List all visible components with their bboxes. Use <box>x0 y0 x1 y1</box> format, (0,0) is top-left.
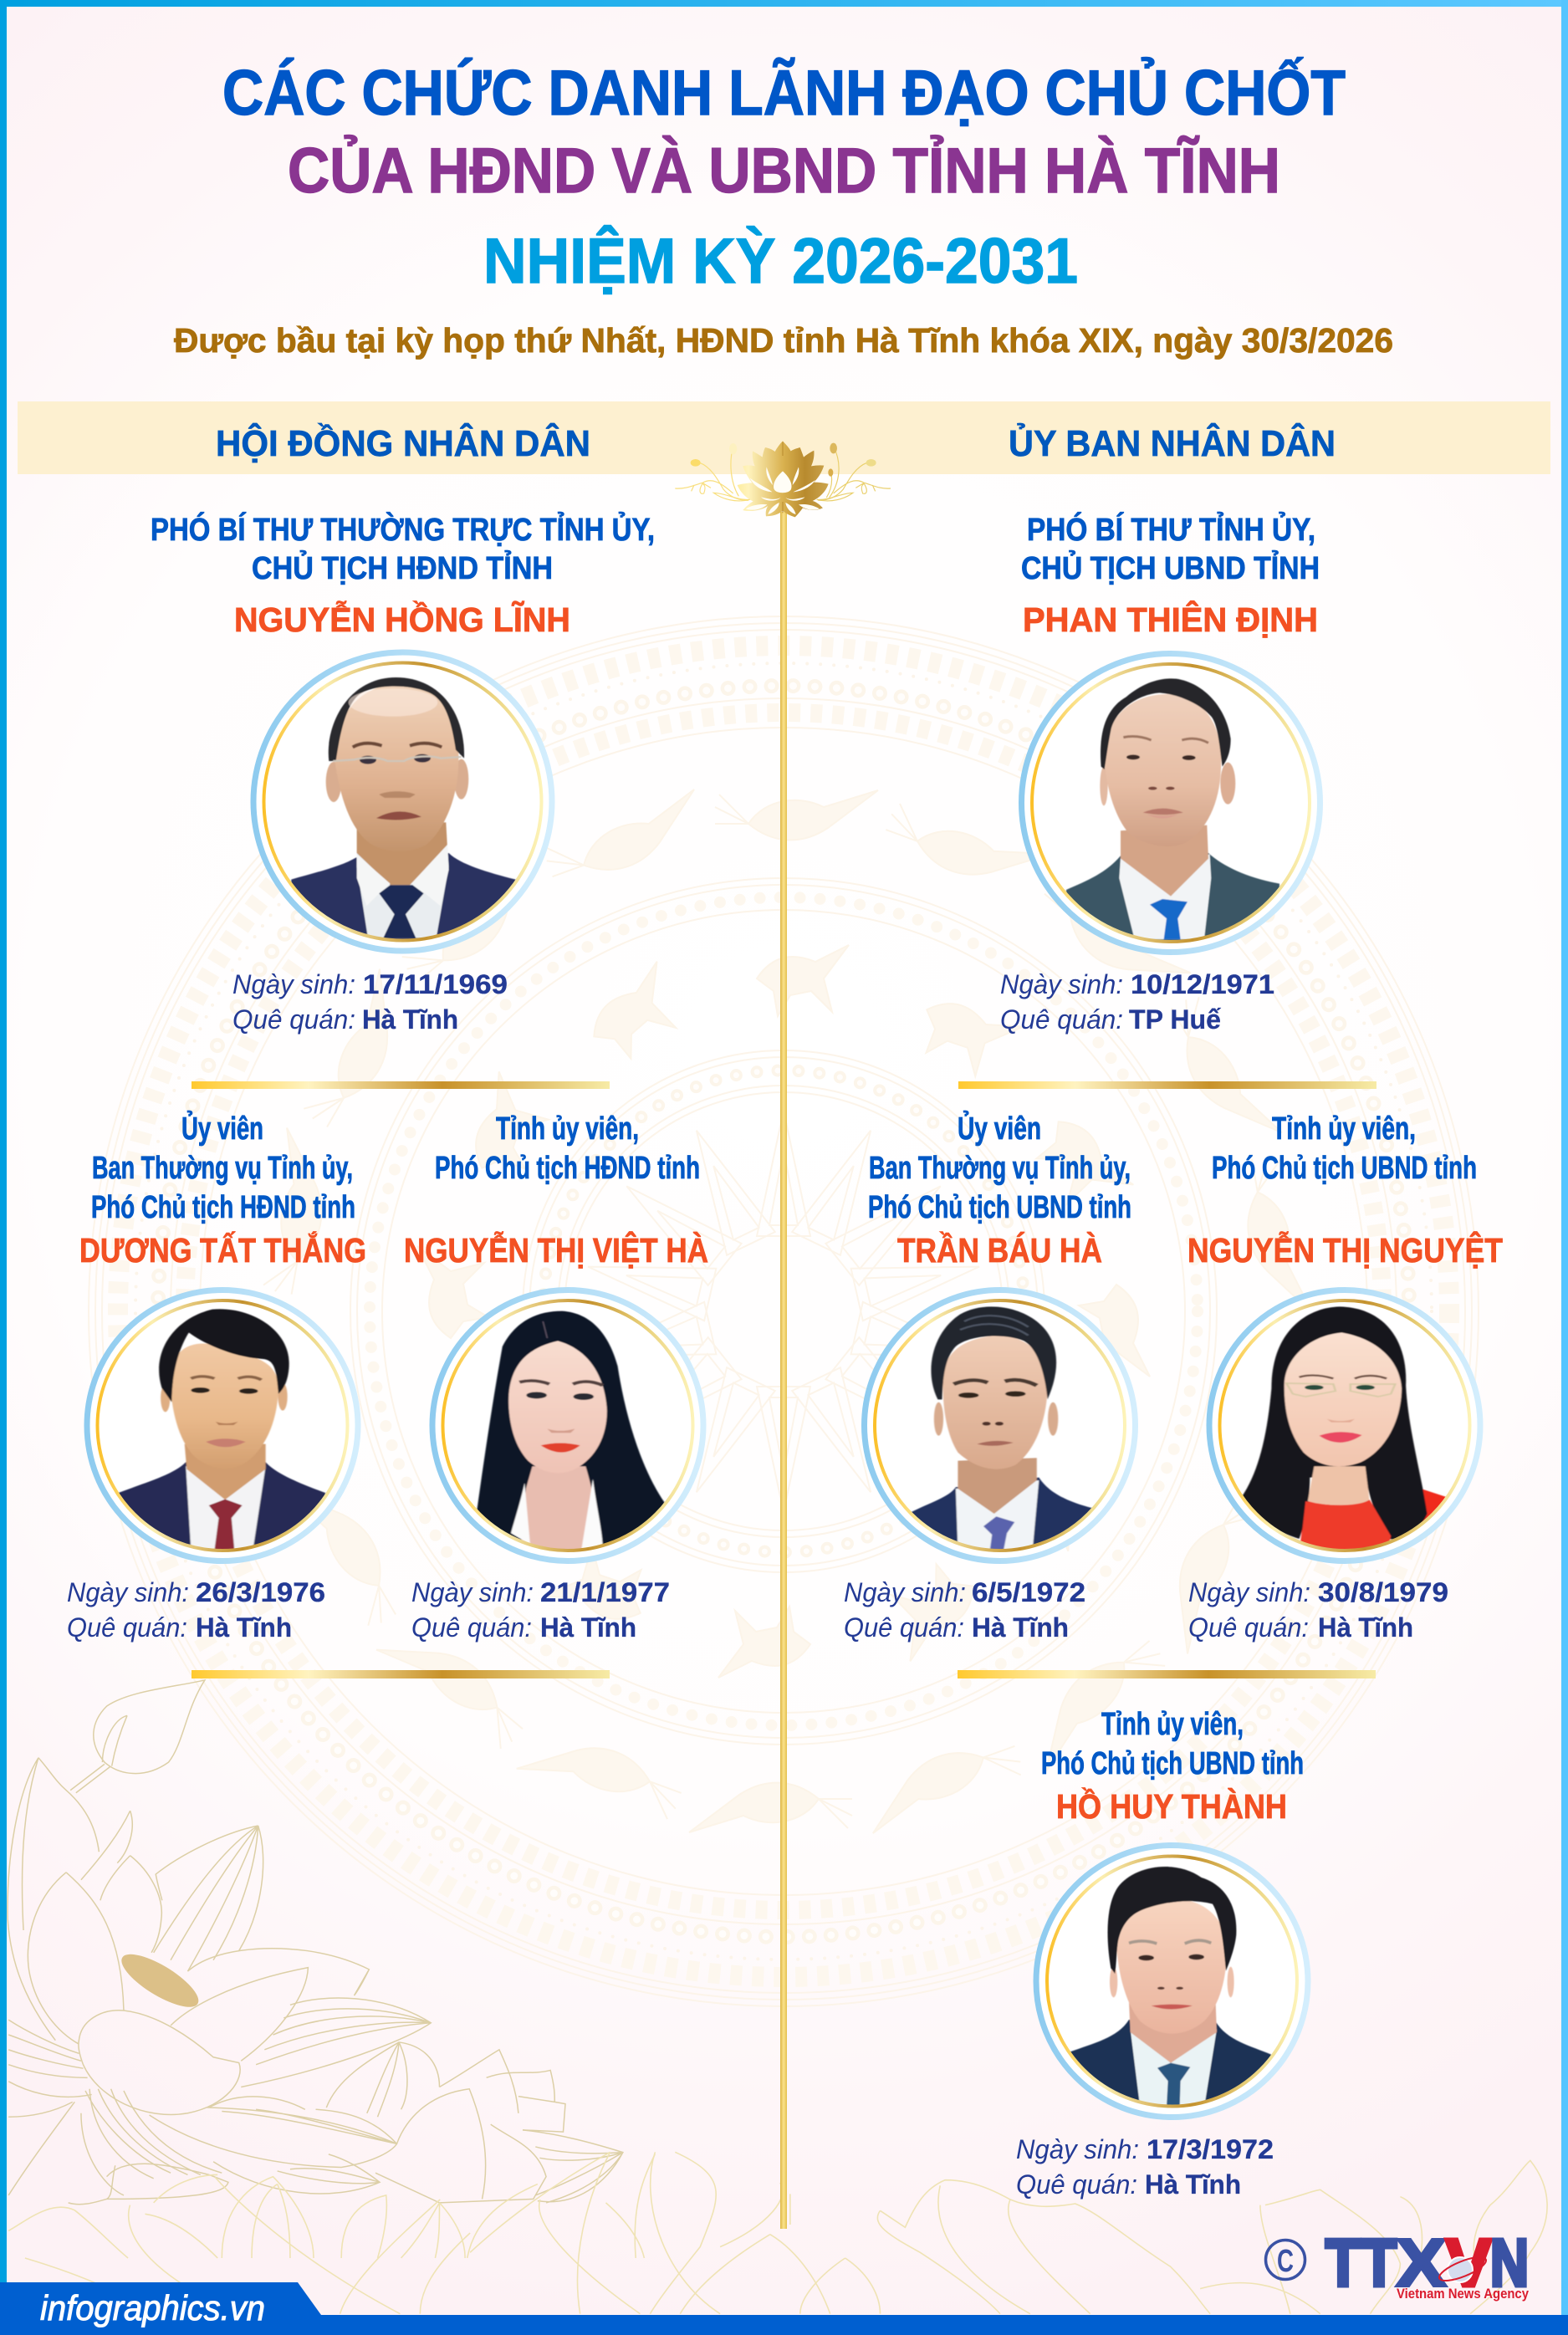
role: Tỉnh ủy viên, <box>496 1111 639 1147</box>
role: council chair: CHỦ TỊCH HĐND TỈNH <box>252 549 553 586</box>
bio: Ngày sinh: <box>232 969 355 999</box>
role <box>1041 1707 1304 1781</box>
logo: TTXVN <box>1325 2225 1529 2302</box>
logo: TTXVN: X <box>1397 2225 1446 2300</box>
bio: 30/8/1979 <box>1318 1577 1448 1607</box>
bio: 17/3/1972 <box>1147 2134 1274 2164</box>
role: committee chair: PHÓ BÍ THƯ TỈNH ỦY, <box>1027 511 1315 548</box>
divider: left row 2 <box>192 1670 610 1678</box>
role: Ủy viên <box>958 1110 1041 1147</box>
name: NGUYỄN THỊ VIỆT HÀ <box>404 1231 708 1270</box>
title line 2: CỦA HĐND VÀ UBND TỈNH HÀ TĨNH <box>288 135 1280 207</box>
bio: Hà Tĩnh <box>196 1612 292 1643</box>
role <box>91 1110 355 1225</box>
bio <box>1000 969 1274 1035</box>
bio: Ngày sinh: <box>1000 969 1123 999</box>
bio: Hà Tĩnh <box>540 1612 636 1643</box>
role: Phó Chủ tịch UBND tỉnh <box>868 1190 1131 1225</box>
role <box>868 1110 1131 1225</box>
divider: right row 2 <box>958 1670 1376 1678</box>
role: committee chair: CHỦ TỊCH UBND TỈNH <box>1021 549 1320 586</box>
bio: Ngày sinh: <box>67 1577 189 1607</box>
logo: TTXVN: V <box>1446 2225 1491 2300</box>
panel: council chair <box>151 511 655 1035</box>
panel: Hồ Huy Thành <box>1016 1707 1308 2200</box>
panel: Dương Tất Thắng <box>67 1110 366 1643</box>
bio: Quê quán: <box>1188 1612 1309 1643</box>
title block <box>174 58 1393 360</box>
icon: copyright symbol <box>1266 2240 1305 2280</box>
bio: Quê quán: <box>1016 2169 1137 2200</box>
bio: 17/11/1969 <box>363 969 508 999</box>
name: HỒ HUY THÀNH <box>1056 1787 1287 1826</box>
agency tagline: Vietnam News Agency <box>1397 2286 1529 2302</box>
bottom blue band <box>0 2315 1568 2335</box>
role <box>1212 1111 1477 1186</box>
background: lotus line art bottom left <box>8 1680 655 2258</box>
bio: Hà Tĩnh <box>1145 2169 1241 2200</box>
role: Phó Chủ tịch UBND tỉnh <box>1212 1151 1477 1186</box>
bio: Ngày sinh: <box>844 1577 966 1607</box>
bio: Quê quán: <box>411 1612 532 1643</box>
title line 3: NHIỆM KỲ 2026-2031 <box>483 225 1078 297</box>
role: Phó Chủ tịch HĐND tỉnh <box>91 1190 355 1225</box>
subtitle: Được bầu tại kỳ họp thứ Nhất, HĐND tỉnh Hà Tĩnh khóa XIX, ngày 30/3/2026 <box>174 321 1393 360</box>
logo: TTXVN: T <box>1361 2225 1397 2300</box>
logo: TTXVN: N <box>1490 2225 1529 2300</box>
icon: copyright symbol: C <box>1277 2244 1294 2279</box>
panel: Nguyễn Thị Nguyệt <box>1187 1111 1503 1643</box>
bio <box>411 1577 670 1643</box>
vertical center divider <box>780 512 787 2229</box>
portrait: Nguyễn Hồng Lĩnh <box>253 652 552 951</box>
divider: left row 1 <box>192 1081 610 1089</box>
bio: Quê quán: <box>67 1612 187 1643</box>
bio: Hà Tĩnh <box>972 1612 1069 1643</box>
bio: TP Huế <box>1129 1004 1221 1035</box>
role: council chair <box>151 511 655 586</box>
portrait: Phan Thiên Định <box>1022 654 1320 952</box>
role: Phó Chủ tịch UBND tỉnh <box>1041 1746 1304 1781</box>
bio: Hà Tĩnh <box>362 1004 458 1035</box>
name: NGUYỄN HỒNG LĨNH <box>234 600 570 639</box>
bio: Hà Tĩnh <box>1318 1612 1413 1643</box>
bio: Quê quán: <box>844 1612 964 1643</box>
bio <box>1188 1577 1448 1643</box>
bio <box>232 969 508 1035</box>
bio: 21/1/1977 <box>540 1577 670 1607</box>
bio: Quê quán: <box>1000 1004 1123 1035</box>
icon: globe <box>1448 2257 1473 2282</box>
icon: golden lotus emblem <box>675 441 891 517</box>
title line 1: CÁC CHỨC DANH LÃNH ĐẠO CHỦ CHỐT <box>222 58 1346 129</box>
bio <box>67 1577 325 1643</box>
footer tab <box>0 2282 321 2327</box>
divider: right row 1 <box>958 1081 1376 1089</box>
logo: TTXVN: T <box>1325 2225 1361 2300</box>
role: Ủy viên <box>181 1110 263 1147</box>
right border <box>1561 0 1568 2335</box>
background: bronze drum pattern <box>89 616 1479 2006</box>
bio: 10/12/1971 <box>1131 969 1274 999</box>
background: lotus line art along bottom <box>25 2152 1547 2314</box>
role: Tỉnh ủy viên, <box>1101 1707 1244 1742</box>
portrait <box>1036 1845 1308 2118</box>
bio: 6/5/1972 <box>972 1577 1085 1607</box>
bio: 26/3/1976 <box>196 1577 325 1607</box>
role <box>435 1111 700 1186</box>
footer site name: infographics.vn <box>40 2288 265 2327</box>
name: PHAN THIÊN ĐỊNH <box>1023 600 1318 639</box>
bio: Ngày sinh: <box>1188 1577 1310 1607</box>
top gradient border <box>0 0 1568 7</box>
name: TRẦN BÁU HÀ <box>897 1231 1102 1270</box>
role: Ban Thường vụ Tỉnh ủy, <box>869 1151 1131 1186</box>
heading: committee: ỦY BAN NHÂN DÂN <box>1009 422 1336 464</box>
name: NGUYỄN THỊ NGUYỆT <box>1187 1231 1503 1270</box>
bio <box>844 1577 1085 1643</box>
section header band <box>18 401 1550 474</box>
left border <box>0 0 7 2335</box>
role: committee chair <box>1021 511 1320 586</box>
bio: Ngày sinh: <box>1016 2134 1139 2164</box>
portrait <box>865 1290 1136 1561</box>
portrait <box>87 1290 358 1561</box>
portrait <box>1209 1290 1480 1561</box>
heading: council: HỘI ĐỒNG NHÂN DÂN <box>216 422 590 464</box>
panel: Nguyễn Thị Việt Hà <box>404 1111 708 1643</box>
role: Ban Thường vụ Tỉnh ủy, <box>92 1151 353 1186</box>
role: Phó Chủ tịch HĐND tỉnh <box>435 1151 700 1186</box>
role: council chair: PHÓ BÍ THƯ THƯỜNG TRỰC TỈNH ỦY, <box>151 511 655 548</box>
bio <box>1016 2134 1274 2200</box>
bio: Ngày sinh: <box>411 1577 534 1607</box>
panel: committee chair <box>1000 511 1320 1035</box>
panel: Trần Báu Hà <box>844 1110 1136 1643</box>
bio: Quê quán: <box>232 1004 355 1035</box>
name: DƯƠNG TẤT THẮNG <box>79 1231 366 1270</box>
portrait <box>432 1290 703 1561</box>
role: Tỉnh ủy viên, <box>1272 1111 1416 1147</box>
